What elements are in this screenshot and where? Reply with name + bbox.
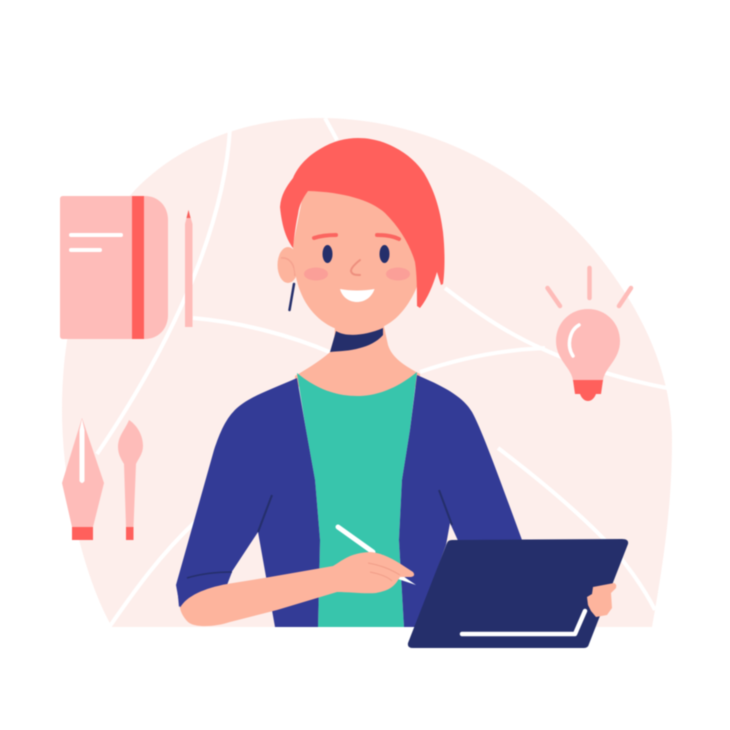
eyebrows [314, 235, 399, 239]
icon: pencil [185, 210, 192, 327]
arm and drawing hand [180, 552, 414, 626]
green shirt [297, 372, 417, 627]
icon: pen nib [62, 418, 104, 540]
jacket left [176, 378, 320, 627]
sleeve fold lines [258, 490, 452, 532]
choker [330, 328, 383, 352]
nose [351, 260, 360, 275]
icon: notebook [60, 196, 168, 339]
tablet hand [587, 583, 616, 617]
eyes [322, 245, 390, 263]
stylus [338, 527, 416, 585]
cheeks [304, 268, 410, 280]
face and ear [278, 185, 425, 332]
neck [295, 322, 420, 412]
icon: light bulb [548, 268, 631, 401]
tablet [408, 539, 628, 648]
background blob [62, 118, 672, 627]
mouth [340, 289, 374, 302]
jacket right [399, 375, 522, 627]
hair [280, 138, 444, 308]
icon: paint brush [118, 420, 143, 540]
sleeve cuff [177, 572, 232, 607]
earring [290, 284, 294, 310]
person [176, 138, 522, 627]
